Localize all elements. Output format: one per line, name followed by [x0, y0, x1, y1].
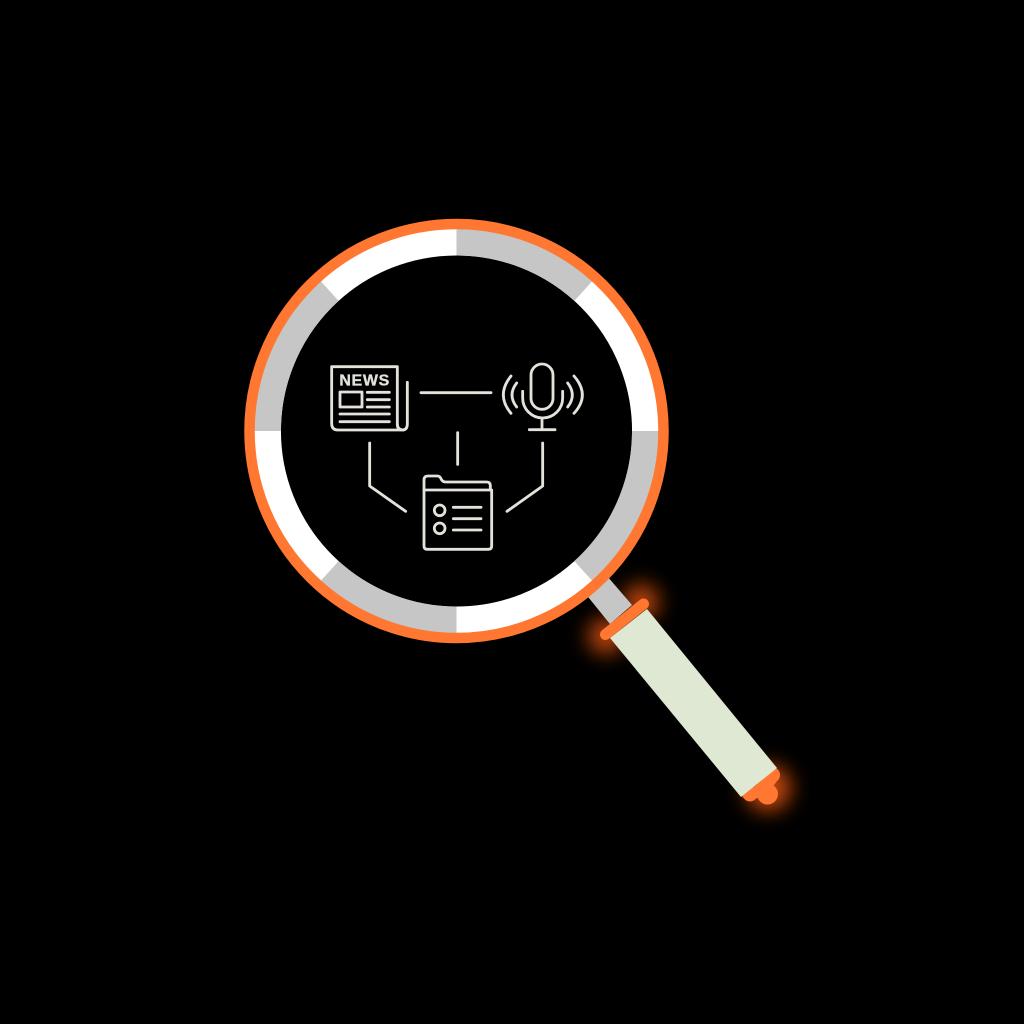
gray ring segments — [267, 242, 646, 620]
handle grip — [610, 609, 777, 797]
handle end cap — [742, 767, 780, 804]
handle shaft — [580, 569, 632, 624]
connector: microphone to folder — [507, 443, 543, 511]
connector: newspaper to microphone — [421, 388, 491, 397]
glow: handle collar — [588, 584, 659, 654]
handle collar — [606, 604, 644, 634]
magnifying glass handle — [580, 569, 791, 811]
icon: folder with list — [424, 476, 492, 549]
connector: newspaper to folder — [370, 443, 406, 511]
connector: center vertical — [453, 433, 462, 464]
newspaper headline: NEWS — [339, 373, 390, 390]
icon: newspaper — [332, 367, 407, 430]
glow: handle end cap — [745, 765, 791, 811]
outer orange rim — [250, 224, 664, 638]
icon: microphone with sound waves — [503, 364, 582, 430]
media network icons — [332, 364, 582, 549]
white ring base — [267, 242, 646, 620]
lens ring — [250, 224, 664, 638]
